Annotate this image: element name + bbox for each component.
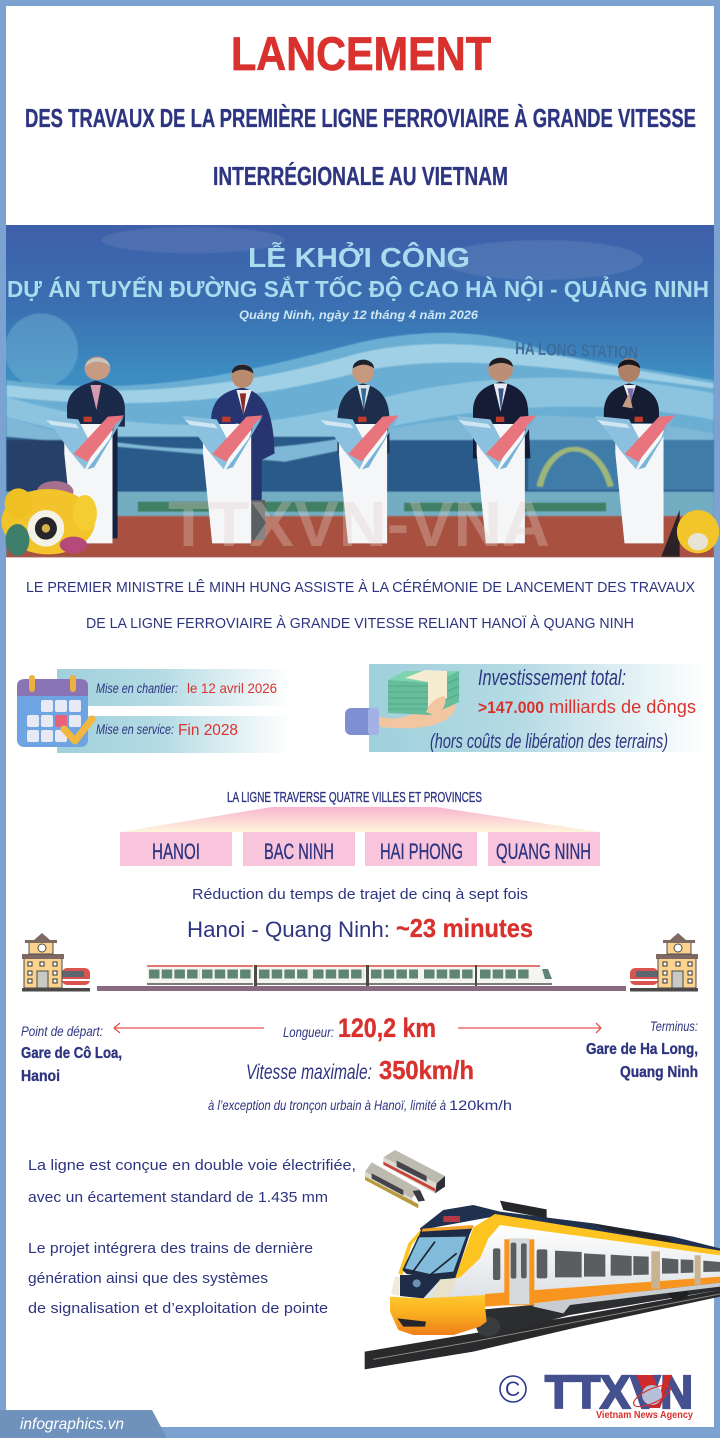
person 5 — [604, 358, 659, 423]
travel time — [187, 886, 533, 943]
panel: schedule — [17, 669, 290, 753]
yellow band upper — [455, 1214, 720, 1278]
orange stripe — [485, 1277, 720, 1307]
icon: high-speed train — [365, 1201, 720, 1369]
departure label: Gare de Cô Loa, — [21, 1045, 122, 1062]
track — [365, 1290, 720, 1369]
windshield — [402, 1235, 469, 1278]
length: Longueur: — [283, 1024, 334, 1040]
panel: investment — [345, 664, 705, 753]
investment text: milliards de dôngs — [549, 697, 696, 717]
technical text: génération ainsi que des systèmes — [28, 1270, 268, 1287]
max speed: Vitesse maximale: — [246, 1061, 372, 1084]
icon: calendar — [17, 675, 92, 747]
title: INTERRÉGIONALE AU VIETNAM — [213, 161, 508, 191]
lights — [443, 1216, 460, 1222]
technical text — [28, 1157, 356, 1317]
departure label: Point de départ: — [21, 1023, 103, 1039]
service date: Fin 2028 — [178, 722, 238, 739]
footer tab: infographics.vn — [20, 1416, 124, 1433]
start date: Mise en chantier: — [96, 680, 178, 696]
arrow: left — [114, 1023, 264, 1033]
photo backdrop text: HA LONG STATION — [515, 339, 638, 362]
door and windows — [504, 1239, 534, 1305]
arrival label: Gare de Ha Long, — [586, 1041, 698, 1058]
city: Hai Phong: HAI PHONG — [380, 839, 463, 864]
nose — [390, 1295, 487, 1335]
technical text: avec un écartement standard de 1.435 mm — [28, 1189, 328, 1206]
icon: train — [147, 965, 552, 986]
service date: Mise en service: — [96, 721, 174, 737]
photo backdrop text: DỰ ÁN TUYẾN ĐƯỜNG SẮT TỐC ĐỘ CAO HÀ NỘI - QUẢNG NINH — [7, 274, 709, 302]
city: Quang Ninh — [488, 832, 600, 866]
ceremony photo — [1, 225, 719, 560]
speed note: à l’exception du tronçon urbain à Hanoï, limité à — [208, 1098, 446, 1113]
icon: arrival station — [630, 933, 698, 992]
speed note: 120km/h — [449, 1098, 512, 1113]
title: LANCEMENT — [231, 27, 491, 80]
copyright symbol: C — [505, 1378, 520, 1401]
person 1 — [67, 357, 125, 538]
length — [283, 1013, 436, 1043]
travel time: Réduction du temps de trajet de cinq à sept fois — [192, 886, 528, 903]
panel: cities: LA LIGNE TRAVERSE QUATRE VILLES ET PROVINCES — [227, 790, 482, 806]
icon: departure station — [22, 933, 90, 992]
travel time: Hanoi - Quang Ninh: — [187, 917, 390, 942]
length: 120,2 km — [338, 1013, 436, 1043]
route diagram — [22, 933, 698, 992]
travel time: ~23 minutes — [396, 913, 533, 943]
arrival label: Quang Ninh — [620, 1064, 698, 1081]
panel: cities — [120, 790, 600, 866]
city: Bac Ninh: BAC NINH — [264, 839, 334, 864]
body — [423, 1225, 720, 1307]
rail line — [97, 986, 626, 991]
photo caption: LE PREMIER MINISTRE LÊ MINH HUNG ASSISTE À LA CÉRÉMONIE DE LANCEMENT DES TRAVAUX — [26, 579, 695, 596]
technical text: Le projet intégrera des trains de dernière — [28, 1240, 313, 1257]
departure label: Hanoi — [21, 1068, 60, 1085]
logo: TTXVN: TTXVN — [545, 1366, 693, 1418]
departure label — [21, 1023, 122, 1085]
city: Hanoi: HANOI — [152, 839, 200, 864]
logo: TTXVN: Vietnam News Agency — [596, 1410, 693, 1421]
photo backdrop text: Quảng Ninh, ngày 12 tháng 4 năm 2026 — [239, 308, 478, 322]
lion dance left — [1, 481, 97, 556]
city: Quang Ninh: QUANG NINH — [496, 839, 591, 864]
city: Hai Phong — [365, 832, 477, 866]
city: Hanoi — [120, 832, 232, 866]
lower skirt — [533, 1283, 720, 1313]
arrow: right — [458, 1023, 601, 1033]
person 3 — [338, 360, 389, 453]
photo caption: DE LA LIGNE FERROVIAIRE À GRANDE VITESSE RELIANT HANOÏ À QUANG NINH — [86, 615, 634, 632]
investment text: Investissement total: — [478, 665, 626, 690]
footer tab — [0, 1410, 167, 1438]
max speed: 350km/h — [379, 1055, 474, 1085]
TTXVN watermark: TTXVN-VNA — [168, 488, 550, 560]
title — [25, 27, 696, 191]
yellow band left — [398, 1228, 423, 1275]
city: Bac Ninh — [243, 832, 355, 866]
arrival label — [586, 1018, 698, 1081]
investment text: >147.000 — [478, 698, 544, 717]
photo backdrop text: LỄ KHỞI CÔNG — [248, 241, 470, 273]
undercarriage — [477, 1280, 720, 1337]
icon: hand with money — [345, 670, 459, 735]
icon: small trains — [365, 1150, 445, 1208]
photo caption — [26, 579, 695, 632]
roof — [420, 1205, 720, 1254]
photo backdrop text — [7, 241, 709, 362]
face — [400, 1275, 455, 1298]
technical text: La ligne est conçue en double voie électrifiée, — [28, 1157, 356, 1174]
start date — [96, 680, 277, 696]
copyright symbol — [500, 1376, 526, 1402]
technical text: de signalisation et d’exploitation de pointe — [28, 1300, 328, 1317]
investment text — [430, 665, 696, 753]
person 2 — [211, 364, 275, 540]
service date — [96, 721, 238, 739]
lion dance right — [661, 510, 719, 557]
arrival label: Terminus: — [650, 1018, 698, 1034]
start date: le 12 avril 2026 — [187, 680, 277, 696]
max speed — [246, 1055, 474, 1085]
person 4 — [473, 357, 530, 458]
hood — [418, 1226, 473, 1237]
